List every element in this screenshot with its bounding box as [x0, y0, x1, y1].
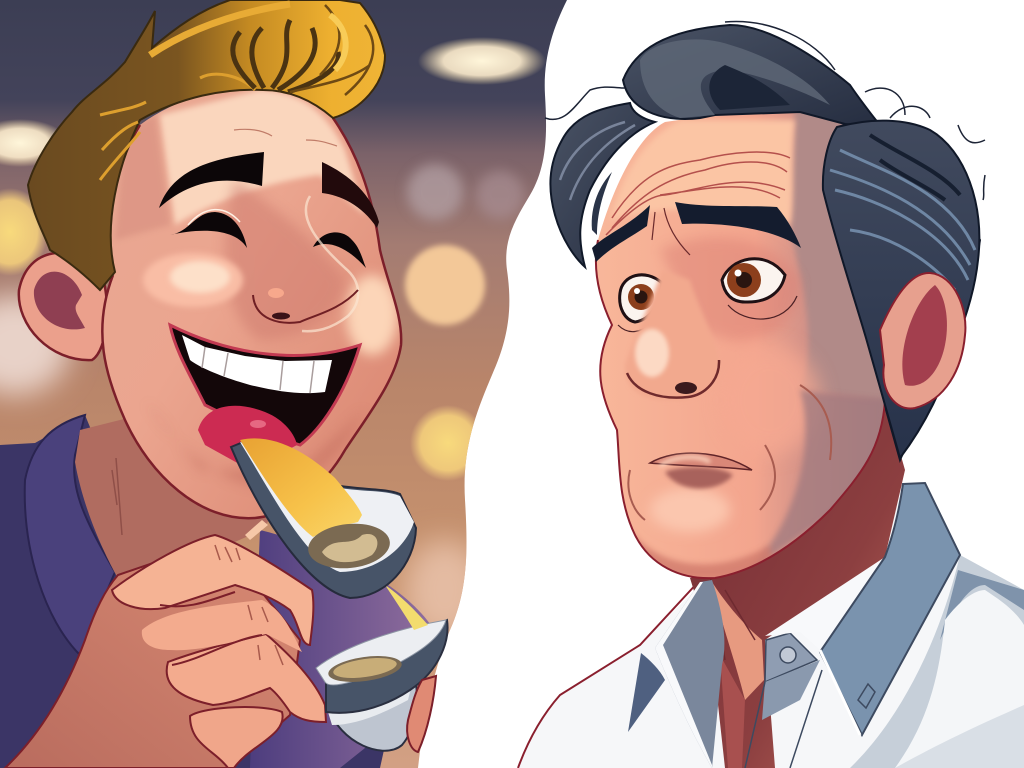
blue-grey right collar — [820, 483, 960, 735]
collar stand with button — [765, 633, 817, 682]
under-eye lines — [618, 296, 797, 332]
wrinkles — [628, 385, 831, 520]
placket — [762, 660, 820, 720]
hair top — [623, 25, 882, 128]
cheek glow — [766, 348, 828, 452]
forehead lines — [234, 129, 337, 146]
right hair — [823, 121, 979, 458]
panel: restaurant bokeh background — [0, 0, 600, 768]
face — [102, 88, 401, 518]
eye right — [722, 259, 785, 302]
back of hand — [5, 540, 300, 768]
finger 1 — [112, 535, 313, 645]
finger 3 — [167, 634, 326, 722]
neck highlight — [712, 582, 764, 700]
forehead highlight — [160, 90, 365, 225]
main oyster shell — [231, 438, 416, 598]
nose tip highlight — [268, 288, 284, 298]
brow crease — [652, 208, 690, 255]
open mouth — [170, 325, 360, 445]
eyebrow right — [675, 202, 801, 248]
cheek right — [346, 275, 398, 355]
nose shade — [225, 180, 345, 340]
forehead wrinkles — [606, 152, 790, 235]
nose — [625, 270, 720, 400]
left collar — [655, 580, 724, 768]
oyster meat — [306, 520, 392, 572]
hair back — [823, 125, 980, 460]
hair — [28, 0, 385, 290]
cheek highlight left — [143, 253, 243, 307]
eyebrow left — [592, 205, 650, 262]
under-cheek shading — [194, 428, 352, 486]
forehead light — [610, 120, 795, 225]
tongue — [198, 406, 297, 470]
temple mauve — [789, 113, 882, 397]
mouth — [650, 453, 752, 470]
closed eye left — [170, 212, 247, 248]
closed eye right — [313, 232, 366, 268]
stray hair — [545, 22, 985, 200]
nose contour — [302, 196, 358, 331]
ear — [19, 253, 107, 360]
finger 4 — [190, 707, 283, 768]
sleeve by shell — [250, 530, 440, 768]
white shirt — [518, 485, 1024, 768]
neck — [690, 400, 905, 768]
lower oyster shell — [316, 620, 448, 751]
shirt collar — [25, 415, 115, 655]
top hair sheen — [640, 39, 830, 118]
eye left — [620, 275, 662, 322]
neck — [75, 400, 340, 590]
face — [596, 108, 885, 578]
ear — [880, 273, 965, 408]
eyebrow right — [322, 162, 379, 228]
eye socket shade — [660, 238, 800, 341]
worried man — [518, 22, 1024, 768]
purple shirt — [0, 415, 395, 768]
fingers behind shell — [407, 676, 436, 752]
oyster yolk — [240, 438, 362, 537]
laughing man — [0, 0, 448, 768]
teeth — [182, 335, 332, 393]
eyebrow left — [159, 152, 264, 208]
shoulder shading — [850, 555, 1024, 768]
hair streaks — [150, 4, 290, 55]
nose highlight — [635, 329, 669, 377]
finger 2 — [142, 600, 302, 652]
chin shade — [650, 488, 730, 532]
left lock — [550, 103, 655, 267]
